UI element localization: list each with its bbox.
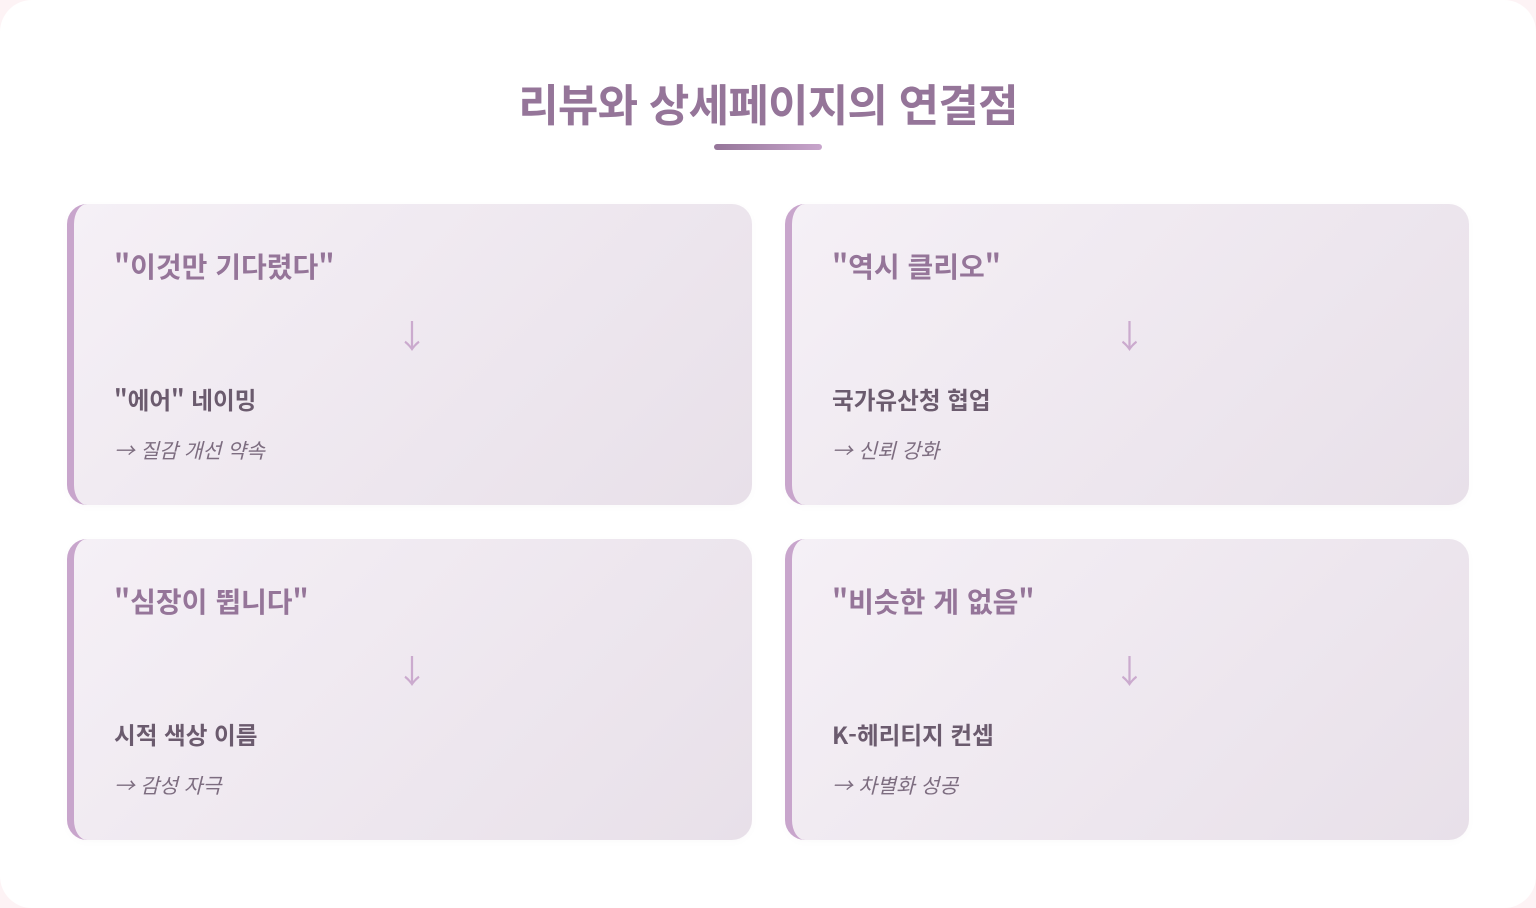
review quote: "비슷한 게 없음" bbox=[832, 581, 1035, 621]
detail page feature: 시적 색상 이름 bbox=[114, 717, 257, 751]
title: 리뷰와 상세페이지의 연결점 bbox=[518, 70, 1018, 134]
effect: → 질감 개선 약속 bbox=[114, 434, 265, 464]
panel: 심장이 뜁니다 bbox=[67, 539, 752, 840]
title underline bbox=[714, 144, 822, 150]
icon: down arrow: ↓ bbox=[396, 646, 428, 693]
panel: 비슷한 게 없음 bbox=[785, 539, 1469, 840]
effect: → 감성 자극 bbox=[114, 769, 221, 799]
icon: down arrow: ↓ bbox=[1113, 646, 1146, 693]
detail page feature: 국가유산청 협업 bbox=[832, 382, 991, 416]
review quote: "심장이 뜁니다" bbox=[114, 581, 309, 621]
panel: 이것만 기다렸다 bbox=[67, 204, 752, 505]
review quote: "이것만 기다렸다" bbox=[114, 246, 334, 286]
detail page feature: "에어" 네이밍 bbox=[114, 382, 256, 416]
panel: 역시 클리오 bbox=[785, 204, 1469, 505]
review quote: "역시 클리오" bbox=[832, 246, 1001, 286]
effect: → 신뢰 강화 bbox=[832, 434, 939, 464]
icon: down arrow: ↓ bbox=[1113, 311, 1146, 358]
detail page feature: K-헤리티지 컨셉 bbox=[832, 717, 994, 751]
icon: down arrow: ↓ bbox=[396, 311, 428, 358]
effect: → 차별화 성공 bbox=[832, 769, 958, 799]
